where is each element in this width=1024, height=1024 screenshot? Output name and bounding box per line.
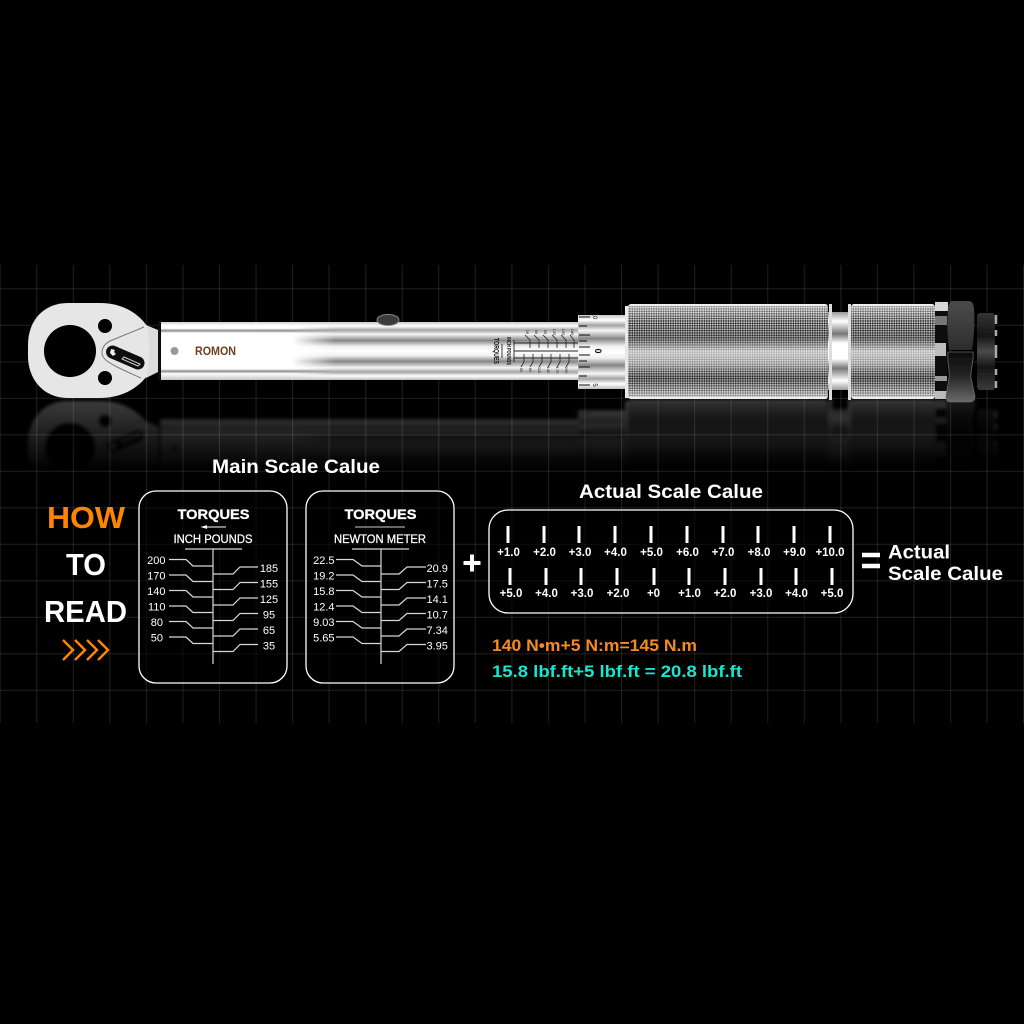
top row values: +10.0: [815, 547, 845, 559]
left scale values: 5.65: [313, 632, 334, 644]
left scale values: 50: [151, 632, 163, 644]
shaft scale marks: 185: [570, 329, 575, 336]
shaft scale marks: 10: [591, 313, 597, 320]
bottom row values: +4.0: [535, 588, 558, 600]
bottom row values: +1.0: [678, 588, 701, 600]
bottom row values: +2.0: [607, 588, 629, 600]
lock collar: [935, 301, 948, 400]
top row values: +7.0: [712, 547, 734, 559]
top row values: +9.0: [783, 547, 806, 559]
left scale values: 22.5: [313, 555, 334, 567]
right scale values: 35: [263, 640, 275, 652]
bottom row values: +4.0: [785, 588, 808, 600]
left scale values: 140: [147, 586, 166, 598]
knurled grip two: [851, 304, 935, 399]
left scale values: 15.8: [313, 586, 334, 598]
panel: newton meter scale: [306, 491, 454, 683]
bottom row values: +2.0: [714, 588, 736, 600]
right scale values: 7.34: [426, 625, 448, 637]
wrench head: [28, 303, 158, 398]
brand logo: ROMON: [195, 344, 236, 358]
right scale values: 10.7: [426, 610, 448, 622]
knurled grip one: [628, 304, 828, 399]
right scale values: 65: [263, 625, 275, 637]
scale ladder: [169, 549, 258, 664]
top row values: +1.0: [497, 547, 520, 559]
left scale values: 80: [151, 617, 163, 629]
scale ladder: [336, 549, 426, 664]
icon: equals sign: [862, 555, 880, 566]
right scale values: [260, 563, 278, 652]
heading: how to read: HOW: [47, 500, 126, 535]
right scale values: 3.95: [426, 640, 448, 652]
icon: orange chevrons: [63, 640, 108, 660]
heading: main scale value: Main Scale Calue: [212, 457, 380, 478]
top row values: +4.0: [604, 547, 627, 559]
right scale values: 95: [263, 610, 275, 622]
end knob: [977, 313, 996, 390]
shaft scale marks: 0: [593, 348, 603, 354]
heading: actual scale value: Actual Scale Calue: [579, 482, 763, 503]
bottom row ticks: [510, 568, 832, 585]
panel: actual scale: [489, 510, 853, 613]
unit label: INCH POUNDS: [174, 534, 253, 546]
bottom row values: +5.0: [500, 588, 522, 600]
right scale values: [426, 563, 448, 652]
top row values: +3.0: [569, 547, 591, 559]
top row values: +8.0: [748, 547, 770, 559]
shaft scale marks: 35: [525, 330, 530, 335]
left scale values: 170: [147, 570, 166, 582]
left scale values: [313, 555, 334, 644]
left scale values: 110: [148, 602, 166, 614]
top row values: +5.0: [640, 547, 663, 559]
scale collar: [578, 306, 629, 398]
shaft scale marks: 200: [564, 367, 569, 374]
shaft scale marks: 155: [561, 329, 566, 336]
heading: how to read: TO: [66, 547, 106, 582]
infographic canvas: [0, 265, 1024, 723]
torque wrench: [28, 301, 996, 402]
wrench reflection: [28, 398, 998, 461]
bottom row values: +3.0: [571, 588, 593, 600]
right scale values: 185: [260, 563, 278, 575]
left scale values: 19.2: [313, 570, 334, 582]
result label: [888, 542, 1003, 585]
shaft scale marks: 140: [546, 367, 551, 374]
panel title: TORQUES: [178, 506, 250, 522]
bottom row values: +3.0: [750, 588, 772, 600]
example: pound feet: 15.8 lbf.ft+5 lbf.ft = 20.8 lbf.ft: [492, 662, 742, 681]
shaft scale marks: 170: [555, 367, 560, 374]
shaft scale marks: 65: [534, 330, 539, 335]
right scale values: 20.9: [426, 563, 448, 575]
panel: inch pounds scale: [139, 491, 287, 683]
left scale values: 9.03: [313, 617, 334, 629]
right scale values: 125: [260, 594, 278, 606]
grip neck: [828, 304, 852, 400]
bottom row values: [500, 588, 843, 600]
unit label: NEWTON METER: [334, 534, 426, 546]
shaft scale marks: 80: [528, 368, 533, 373]
heading: how to read: [44, 500, 127, 629]
shaft scale marks: [492, 313, 603, 387]
wrench shaft: [158, 314, 581, 380]
divider line: [355, 526, 405, 528]
bottom row values: +0: [647, 588, 660, 600]
top row ticks: [508, 526, 830, 543]
shaft scale marks: 5: [591, 383, 597, 387]
right scale values: 14.1: [426, 594, 448, 606]
shaft scale marks: 95: [543, 330, 548, 335]
shaft scale marks: INCH POUNDS: [505, 337, 511, 365]
heading: how to read: READ: [44, 594, 127, 629]
top row values: [497, 547, 845, 559]
shaft scale marks: 50: [519, 368, 524, 373]
direction arrow: [202, 526, 226, 528]
panel title: TORQUES: [344, 506, 416, 522]
top row values: +2.0: [533, 547, 556, 559]
right scale values: 17.5: [426, 578, 448, 590]
result label: Actual: [888, 542, 950, 564]
icon: plus sign: [464, 554, 480, 572]
left scale values: 200: [147, 555, 166, 567]
bottom row values: +5.0: [821, 588, 843, 600]
shaft scale marks: TORQUES: [492, 338, 499, 364]
shaft scale marks: 110: [537, 367, 542, 374]
left scale values: [147, 555, 166, 644]
hex lock nut: [946, 301, 975, 402]
example: newton metres: 140 N•m+5 N:m=145 N.m: [492, 636, 697, 655]
result label: Scale Calue: [888, 564, 1003, 585]
top row values: +6.0: [676, 547, 699, 559]
shaft scale marks: 125: [552, 329, 557, 336]
left scale values: 12.4: [313, 602, 334, 614]
right scale values: 155: [260, 578, 278, 590]
